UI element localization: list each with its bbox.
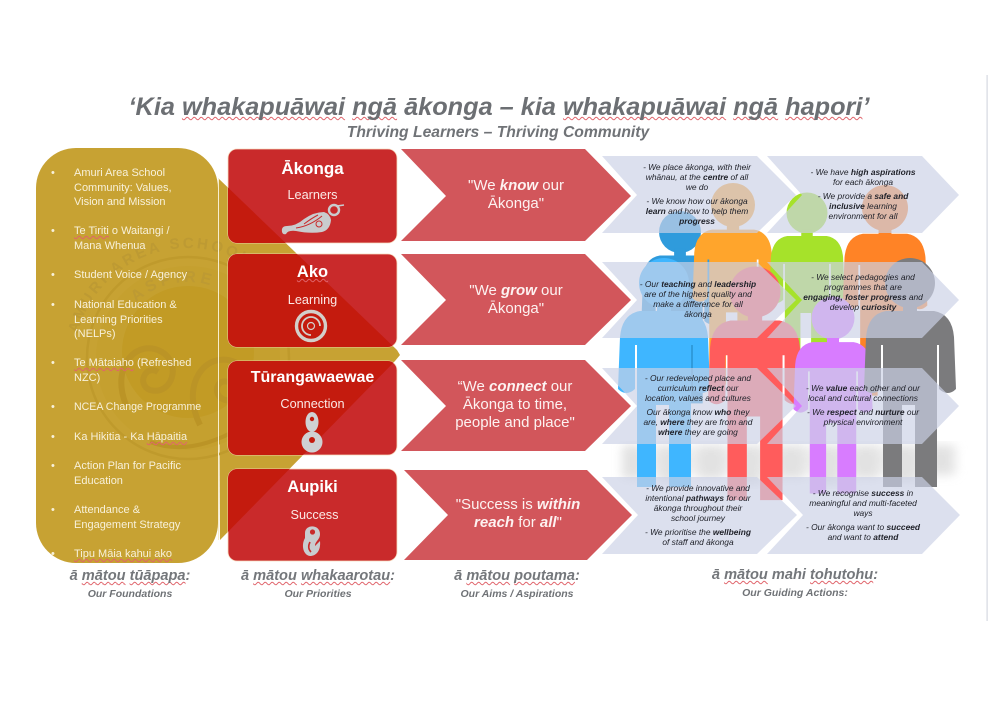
priority: Tūrangawaewae: Connection [280, 397, 345, 411]
foundation item: Student Voice / Agency [74, 269, 187, 281]
foundation item: National Education & [74, 299, 177, 311]
action text: row 2 right [803, 272, 923, 312]
foundation item [74, 225, 170, 252]
caption: guiding actions [712, 567, 878, 599]
icon: twist pendant [302, 412, 322, 452]
priority: Ako: Learning [288, 293, 337, 307]
watermark: school logo: ASPIRE [128, 269, 217, 305]
people illustration [618, 183, 956, 500]
person: front purple [793, 296, 873, 493]
foundation item: Vision and Mission [74, 196, 166, 208]
panel: foundations text: • [51, 504, 55, 516]
icon: hook pendant [303, 526, 320, 556]
watermark: school logo [69, 238, 254, 460]
priority: Ako: Ako [297, 263, 328, 281]
panel edge line [986, 75, 988, 621]
action text: row 4 right: meaningful and multi-faceted [809, 498, 917, 508]
foundation item [74, 167, 172, 208]
foundation item: Te Mātaiaho (Refreshed [74, 357, 191, 369]
foundation item [74, 504, 180, 531]
action text: row 1 right [810, 167, 916, 221]
aim: success [456, 496, 580, 531]
foundation item: NZC) [74, 372, 100, 384]
foundation item: Te Tiriti o Waitangi / [74, 225, 170, 237]
action text: row 1 left: whānau, at the centre of all [646, 172, 748, 182]
panel: foundations text: • [51, 269, 55, 281]
panel: foundations text: • [51, 401, 55, 413]
action text: row 1 left: learn and how to help them [646, 206, 748, 216]
aim: success: reach for all" [474, 514, 562, 531]
caption: guiding actions: Our Guiding Actions: [742, 587, 848, 599]
panel: foundations text: • [51, 167, 55, 179]
aim: know: Ākonga" [488, 195, 544, 212]
action text: row 4 left: of staff and ākonga [662, 537, 734, 547]
priority: Ākonga [281, 159, 344, 202]
action text: row 2 left: ākonga [684, 309, 712, 319]
foundation item: Attendance & [74, 504, 140, 516]
action text: row 3 left: - Our redeveloped place and [645, 373, 751, 383]
action text: row 3 left: are, where they are from and [644, 417, 752, 427]
foundation item: Learning Priorities [74, 314, 163, 326]
action text: row 1 left [643, 162, 752, 226]
foundation item: (NELPs) [74, 328, 116, 340]
foundation item: Amuri Area School [74, 167, 165, 179]
aim: connect: Ākonga to time, [463, 396, 567, 413]
foundation item: Engagement Strategy [74, 519, 180, 531]
foundation item [74, 299, 177, 340]
priority: Aupiki: Aupiki [287, 478, 338, 496]
title: ‘Kia whakapuāwai ngā ākonga – kia whakapuāwai ngā hapori’ [129, 93, 869, 121]
action text: row 2 left: make a difference for all [653, 299, 743, 309]
aim: connect: “We connect our [458, 378, 572, 395]
action text: row 1 left: - We know how our ākonga [646, 196, 748, 206]
aim: know [468, 177, 564, 212]
priority: Ākonga: Learners [287, 188, 338, 202]
icon: bird [282, 205, 344, 234]
aim: know: "We know our [468, 177, 564, 194]
action text: row 2 left: are of the highest quality and [644, 289, 752, 299]
foundation item [74, 357, 191, 384]
action text: row 1 right: inclusive learning [829, 201, 897, 211]
action text: row 2 right: programmes that are [824, 282, 902, 292]
action text: row 4 left [645, 483, 751, 547]
action text: row 1 left: progress [679, 216, 715, 226]
subtitle: Thriving Learners – Thriving Community [347, 124, 649, 141]
foundation item: Community: Values, [74, 182, 172, 194]
caption: foundations: Our Foundations [88, 588, 172, 600]
panel: foundations text: • [51, 460, 55, 472]
action text: row 4 right: ways [853, 508, 873, 518]
action text: row 3 left: curriculum reflect our [658, 383, 738, 393]
caption: aspirations [454, 568, 580, 600]
shadow of people [622, 445, 957, 485]
action text: row 1 right: - We have high aspirations [810, 167, 916, 177]
person: back green [769, 192, 845, 380]
action text: row 4 right [806, 488, 920, 542]
foundation item: Tipu Māia kahui ako [74, 548, 172, 560]
action text: row 2 right: engaging, foster progress and [803, 292, 923, 302]
person: front red [708, 266, 802, 500]
gold arrow behind priorities [218, 178, 400, 540]
caption: priorities [241, 568, 395, 600]
foundation item: NCEA Change Programme [74, 401, 201, 413]
foundation item: Mana Whenua [74, 240, 146, 252]
action text: row 4 left: intentional pathways for our [645, 493, 751, 503]
action text: row 4 right: and want to attend [828, 532, 898, 542]
action text: row 2 left: - Our teaching and leadership [640, 279, 756, 289]
guiding action chevrons [602, 156, 960, 554]
action text: row 3 left: where they are going [658, 427, 738, 437]
caption: foundations: ā mātou tūāpapa: [70, 568, 190, 584]
caption: priorities: Our Priorities [284, 588, 352, 600]
icon: koru spiral [296, 312, 326, 340]
action text: row 4 left: - We prioritise the wellbeing [645, 527, 751, 537]
aim: grow [469, 282, 563, 317]
person: back blue [641, 211, 719, 403]
priorities boxes [228, 149, 397, 561]
priority: Aupiki: Success [291, 508, 338, 522]
action text: row 1 left: - We place ākonga, with their [643, 162, 751, 172]
action text: row 2 right: develop curiosity [830, 302, 896, 312]
person: back orange [693, 183, 773, 385]
caption: aspirations: Our Aims / Aspirations [460, 588, 574, 600]
aim: grow: Ākonga" [488, 300, 544, 317]
action text: row 2 left [640, 279, 756, 319]
action text: row 3 right: local and cultural connections [808, 393, 918, 403]
action text: row 4 right: - Our ākonga want to succeed [806, 522, 920, 532]
action text: row 3 right [806, 383, 920, 427]
action text: row 1 right: for each ākonga [833, 177, 893, 187]
action text: row 2 right: - We select pedagogies and [811, 272, 915, 282]
caption: priorities: ā mātou whakaarotau: [241, 568, 395, 584]
aim: grow: "We grow our [469, 282, 563, 299]
panel: foundations text: • [51, 548, 55, 560]
panel: foundations background [36, 148, 218, 563]
caption: aspirations: ā mātou poutama: [454, 568, 580, 584]
action text: row 1 left: we do [686, 182, 708, 192]
panel: foundations text: • [51, 299, 55, 311]
action text: row 3 right: - We respect and nurture our [807, 407, 919, 417]
panel: foundations text: • [51, 431, 55, 443]
caption: guiding actions: ā mātou mahi tohutohu: [712, 567, 878, 583]
aim: connect [455, 378, 575, 431]
foundation item [74, 460, 181, 487]
foundation item: Education [74, 475, 123, 487]
action text: row 4 left: school journey [671, 513, 725, 523]
action text: row 1 right: - We provide a safe and [818, 191, 908, 201]
caption: foundations [70, 568, 190, 600]
panel: foundations text: • [51, 357, 55, 369]
aims chevrons [401, 149, 632, 560]
person: front blue [618, 258, 710, 487]
priority: Aupiki [287, 478, 338, 522]
panel: foundations text [51, 167, 201, 562]
action text: row 3 left: Our ākonga know who they [647, 407, 749, 417]
action text: row 1 right: environment for all [829, 211, 897, 221]
aim: connect: people and place" [455, 414, 575, 431]
watermark: school logo: AMURI AREA SCHOOL [69, 238, 246, 333]
action text: row 3 right: - We value each other and our [806, 383, 920, 393]
panel dividing line [218, 178, 219, 540]
action text: row 4 right: - We recognise success in [813, 488, 913, 498]
action text: row 3 left [644, 373, 753, 437]
action text: row 4 left: - We provide innovative and [646, 483, 750, 493]
aim: success: "Success is within [456, 496, 580, 513]
action text: row 3 right: physical environment [824, 417, 902, 427]
person: back dark orange [843, 185, 927, 396]
priority: Ākonga: Ākonga [281, 159, 344, 178]
person: front grey [864, 258, 956, 487]
action text: row 3 left: location, values and cultures [645, 393, 751, 403]
priority: Ako [288, 263, 337, 307]
foundation item: Ka Hikitia - Ka Hāpaitia [74, 431, 187, 443]
action text: row 4 left: ākonga throughout their [654, 503, 742, 513]
priority: Tūrangawaewae [250, 369, 374, 411]
foundation item: Action Plan for Pacific [74, 460, 181, 472]
panel: foundations text: • [51, 225, 55, 237]
priority: Tūrangawaewae: Tūrangawaewae [251, 369, 374, 386]
